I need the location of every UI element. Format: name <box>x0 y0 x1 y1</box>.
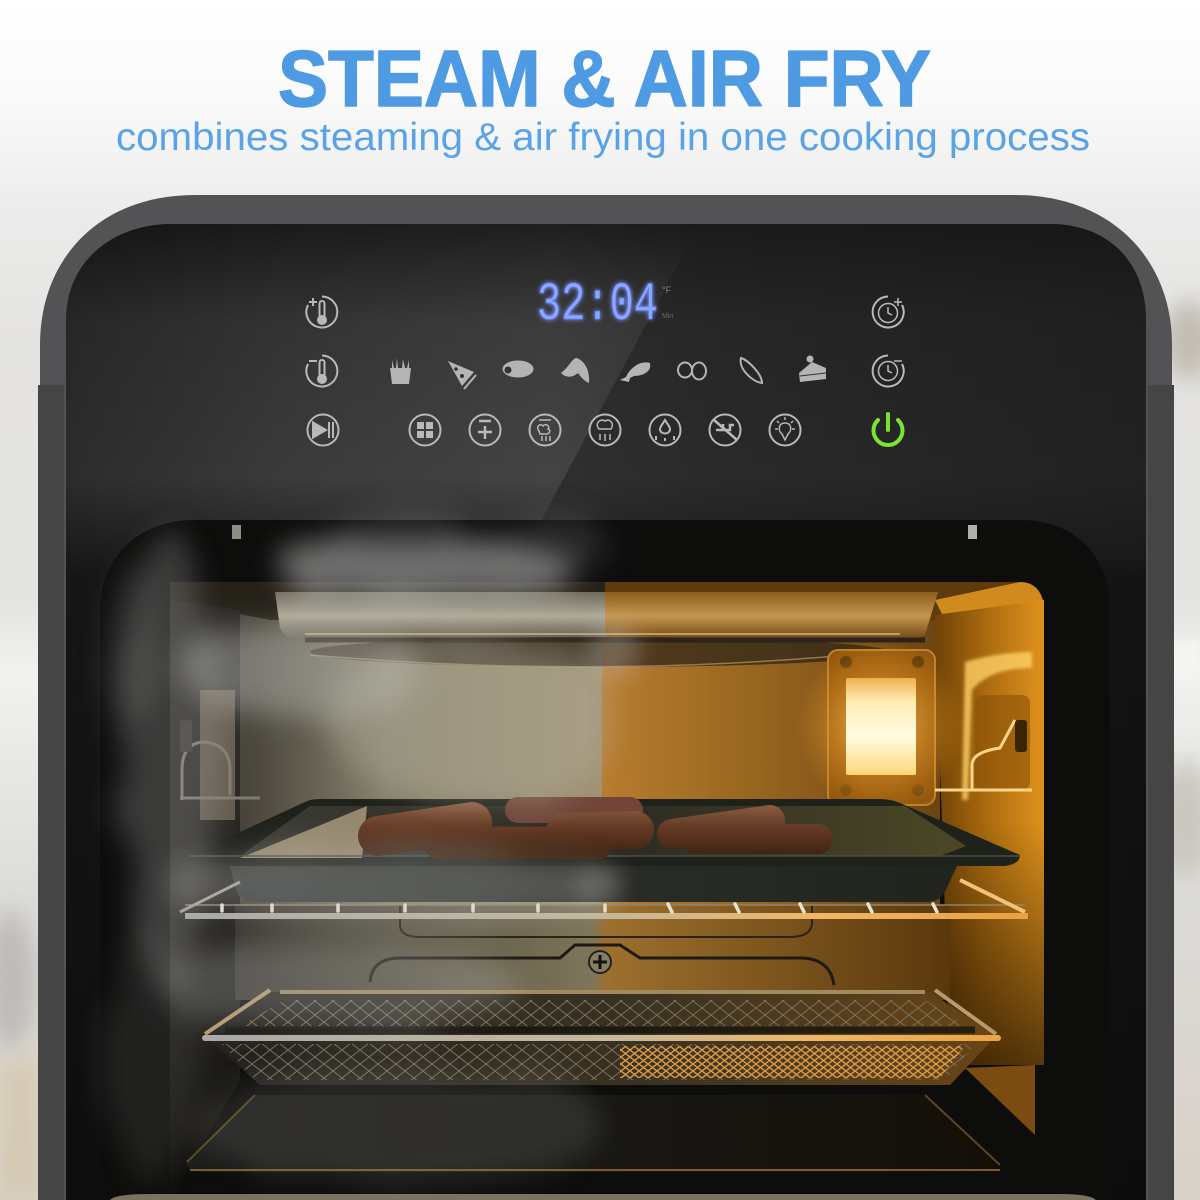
fish <box>620 362 650 382</box>
temperature up icon <box>306 296 337 327</box>
digital display: 32:04 <box>537 275 658 336</box>
pizza <box>448 361 476 389</box>
water drop <box>650 414 680 446</box>
play pause icon <box>308 414 338 446</box>
back wall fry half <box>602 590 940 910</box>
lamp glow <box>795 641 965 811</box>
black glass panel <box>66 224 1146 1200</box>
oven cavity <box>100 520 1110 1200</box>
steam overlay <box>105 505 640 1185</box>
door opening <box>100 520 1110 1200</box>
cake <box>799 356 826 382</box>
title: STEAM & AIR FRY <box>278 34 931 123</box>
eggs <box>678 362 706 380</box>
wire rack <box>180 880 1028 916</box>
steak <box>502 360 534 378</box>
middle sausage <box>565 830 635 832</box>
function icons row <box>410 414 800 446</box>
timer down icon <box>873 356 904 386</box>
front sausage <box>440 826 597 860</box>
left side wall <box>170 600 240 1200</box>
back wall steam half <box>170 590 602 910</box>
left sausage <box>378 822 472 836</box>
sausages <box>378 810 818 843</box>
rack hangers <box>180 720 1032 800</box>
power button <box>874 414 902 445</box>
sweet potato <box>741 358 762 383</box>
chicken wing <box>561 358 589 383</box>
grid menu <box>410 414 440 446</box>
temperature down icon <box>306 356 337 386</box>
lower back wall <box>235 905 950 1000</box>
bottom pan <box>187 1065 1035 1172</box>
right sausages <box>672 820 818 839</box>
lamp window <box>846 678 916 775</box>
fries <box>390 358 411 384</box>
ceiling <box>170 582 1044 620</box>
subtitle: combines steaming & air frying in one cooking process <box>116 116 1090 159</box>
light <box>770 414 800 446</box>
display unit Min: Min <box>662 313 673 320</box>
air fryer oven body <box>38 195 1174 1200</box>
steam low <box>530 414 560 446</box>
door bottom edge <box>110 1194 1096 1200</box>
display unit F: °F <box>662 285 672 295</box>
baking tray <box>190 799 1020 902</box>
top tray <box>275 592 938 667</box>
descale tap <box>710 414 740 446</box>
steam high <box>590 414 620 446</box>
outer grey housing <box>40 195 1172 1200</box>
steam fringe across centre <box>578 620 640 905</box>
air fry basket <box>205 990 998 1085</box>
right side wall <box>935 600 1044 1065</box>
fan <box>470 414 500 446</box>
timer up icon <box>873 296 904 327</box>
lamp housing <box>828 650 935 805</box>
food preset icons <box>390 356 826 389</box>
back sausage <box>518 797 630 823</box>
